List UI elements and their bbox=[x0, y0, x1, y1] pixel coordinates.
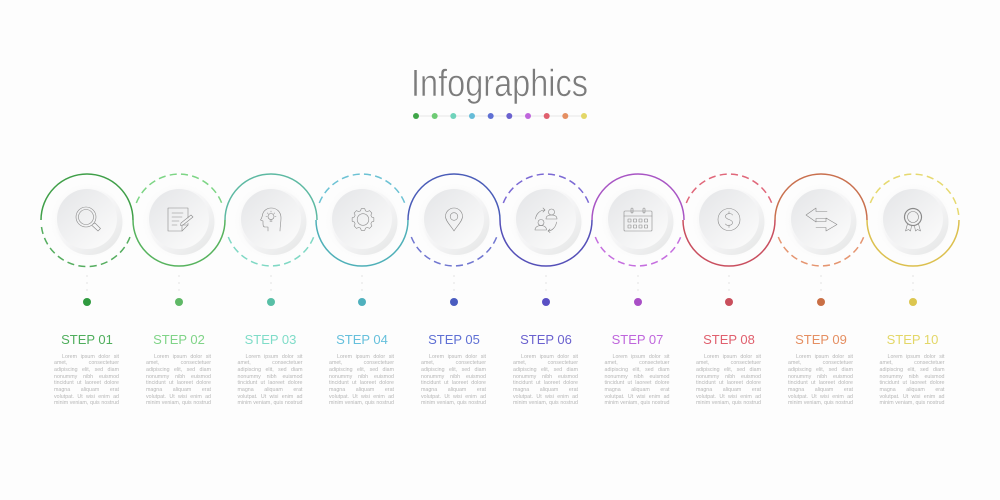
label: STEP 07 bbox=[612, 332, 663, 347]
label: STEP 02 bbox=[153, 332, 205, 347]
connector dots bbox=[636, 275, 638, 291]
body text: magna aliquam erat bbox=[880, 387, 944, 393]
marker dot bbox=[450, 298, 458, 306]
panel: step 08 bbox=[682, 173, 776, 406]
graphic: step 06 bbox=[499, 173, 593, 306]
label: STEP 08 bbox=[703, 332, 755, 347]
connector dots bbox=[361, 275, 363, 291]
body text: adipiscing elit, sed diam bbox=[788, 367, 853, 373]
body text: magna aliquam erat bbox=[696, 387, 761, 393]
body text: minim veniam, quis nostrud bbox=[513, 400, 578, 406]
body text bbox=[880, 354, 944, 406]
body text: nonummy nibh euismod bbox=[513, 374, 578, 380]
body text: tincidunt ut laoreet dolore bbox=[146, 380, 211, 386]
body text: nonummy nibh euismod bbox=[238, 374, 302, 380]
panel: step 03 bbox=[224, 173, 318, 406]
body text: tincidunt ut laoreet dolore bbox=[880, 380, 944, 386]
ring: step 07 bbox=[592, 174, 684, 266]
body text: tincidunt ut laoreet dolore bbox=[696, 380, 761, 386]
body text: amet, consectetuer bbox=[513, 360, 578, 366]
body text bbox=[238, 354, 302, 406]
body text: amet, consectetuer bbox=[421, 360, 486, 366]
body text: volutpat. Ut wisi enim ad bbox=[238, 394, 302, 400]
body text: magna aliquam erat bbox=[146, 387, 211, 393]
body text: volutpat. Ut wisi enim ad bbox=[696, 394, 761, 400]
header: title and colour dots bbox=[411, 63, 588, 119]
connector dots bbox=[453, 275, 455, 291]
body text: Lorem ipsum dolor sit bbox=[154, 354, 211, 360]
marker dot bbox=[817, 298, 825, 306]
marker dot bbox=[83, 298, 91, 306]
body text: magna aliquam erat bbox=[54, 387, 119, 393]
body text: adipiscing elit, sed diam bbox=[238, 367, 302, 373]
body text: minim veniam, quis nostrud bbox=[146, 400, 211, 406]
marker dot bbox=[175, 298, 183, 306]
ring: step 10 bbox=[866, 174, 958, 266]
body text: Lorem ipsum dolor sit bbox=[704, 354, 761, 360]
body text: Lorem ipsum dolor sit bbox=[246, 354, 302, 360]
body text: amet, consectetuer bbox=[880, 360, 944, 366]
body text bbox=[696, 354, 761, 406]
body text: magna aliquam erat bbox=[604, 387, 670, 393]
icon: exchange arrows bbox=[806, 208, 837, 231]
body text: minim veniam, quis nostrud bbox=[696, 400, 761, 406]
connector dots bbox=[270, 275, 272, 291]
body text: Lorem ipsum dolor sit bbox=[521, 354, 578, 360]
label: STEP 06 bbox=[520, 332, 572, 347]
panel: step 10 bbox=[866, 173, 960, 406]
body text: minim veniam, quis nostrud bbox=[788, 400, 853, 406]
label: STEP 05 bbox=[428, 332, 480, 347]
body text: amet, consectetuer bbox=[788, 360, 853, 366]
graphic: step 01 bbox=[40, 173, 134, 306]
graphic: step 02 bbox=[132, 173, 226, 306]
title: Infographics bbox=[411, 63, 588, 105]
body text: adipiscing elit, sed diam bbox=[513, 367, 578, 373]
body text: volutpat. Ut wisi enim ad bbox=[329, 394, 394, 400]
marker dot bbox=[542, 298, 550, 306]
body text: volutpat. Ut wisi enim ad bbox=[146, 394, 211, 400]
body text bbox=[146, 354, 211, 406]
panel: step 04 bbox=[315, 173, 409, 406]
ring: step 05 bbox=[408, 174, 500, 266]
panel: step 06 bbox=[499, 173, 593, 406]
body text bbox=[421, 354, 486, 406]
connector dots bbox=[178, 275, 180, 291]
body text: amet, consectetuer bbox=[604, 360, 670, 366]
body text: adipiscing elit, sed diam bbox=[329, 367, 394, 373]
body text: adipiscing elit, sed diam bbox=[54, 367, 119, 373]
body text: Lorem ipsum dolor sit bbox=[612, 354, 670, 360]
body text: volutpat. Ut wisi enim ad bbox=[604, 394, 670, 400]
body text bbox=[54, 354, 119, 406]
body text: minim veniam, quis nostrud bbox=[54, 400, 119, 406]
body text: volutpat. Ut wisi enim ad bbox=[54, 394, 119, 400]
panel: step 02 bbox=[132, 173, 226, 406]
body text: minim veniam, quis nostrud bbox=[880, 400, 944, 406]
icon: document and pen bbox=[168, 208, 193, 231]
icon: gear bbox=[352, 209, 374, 230]
body text: nonummy nibh euismod bbox=[696, 374, 761, 380]
body text: tincidunt ut laoreet dolore bbox=[421, 380, 486, 386]
body text: nonummy nibh euismod bbox=[880, 374, 944, 380]
ring: step 08 bbox=[683, 174, 775, 266]
body text: volutpat. Ut wisi enim ad bbox=[788, 394, 853, 400]
body text: tincidunt ut laoreet dolore bbox=[238, 380, 302, 386]
body text: minim veniam, quis nostrud bbox=[604, 400, 670, 406]
body text: minim veniam, quis nostrud bbox=[421, 400, 486, 406]
graphic: step 03 bbox=[224, 173, 318, 306]
marker dot bbox=[634, 298, 642, 306]
icon: people exchange bbox=[535, 208, 557, 232]
graphic: step 07 bbox=[591, 173, 685, 306]
body text: Lorem ipsum dolor sit bbox=[796, 354, 853, 360]
ring: step 02 bbox=[133, 174, 225, 266]
body text bbox=[513, 354, 578, 406]
body text: adipiscing elit, sed diam bbox=[421, 367, 486, 373]
icon: dollar coin bbox=[718, 208, 740, 230]
body text: amet, consectetuer bbox=[696, 360, 761, 366]
icon: calendar bbox=[624, 208, 652, 231]
body text bbox=[329, 354, 394, 406]
graphic: step 09 bbox=[774, 173, 868, 306]
panel: step 09 bbox=[774, 173, 868, 406]
body text: magna aliquam erat bbox=[788, 387, 853, 393]
body text: magna aliquam erat bbox=[238, 387, 302, 393]
body text: amet, consectetuer bbox=[146, 360, 211, 366]
body text: adipiscing elit, sed diam bbox=[880, 367, 944, 373]
marker dot bbox=[725, 298, 733, 306]
graphic: step 05 bbox=[407, 173, 501, 306]
graphic: step 08 bbox=[682, 173, 776, 306]
body text: tincidunt ut laoreet dolore bbox=[329, 380, 394, 386]
body text: magna aliquam erat bbox=[513, 387, 578, 393]
body text: Lorem ipsum dolor sit bbox=[429, 354, 486, 360]
icon: magnifier bbox=[76, 207, 100, 231]
body text: adipiscing elit, sed diam bbox=[604, 367, 670, 373]
body text: nonummy nibh euismod bbox=[329, 374, 394, 380]
marker dot bbox=[908, 298, 916, 306]
label: STEP 10 bbox=[887, 332, 938, 347]
body text: amet, consectetuer bbox=[238, 360, 302, 366]
body text: nonummy nibh euismod bbox=[788, 374, 853, 380]
body text: magna aliquam erat bbox=[329, 387, 394, 393]
icon: head with bulb bbox=[260, 208, 280, 231]
connector dots bbox=[545, 275, 547, 291]
panel: step 07 bbox=[591, 173, 685, 406]
connector dots bbox=[820, 275, 822, 291]
body text: amet, consectetuer bbox=[54, 360, 119, 366]
body text: minim veniam, quis nostrud bbox=[238, 400, 302, 406]
ring: step 04 bbox=[316, 174, 408, 266]
body text: volutpat. Ut wisi enim ad bbox=[513, 394, 578, 400]
ring: step 01 bbox=[41, 174, 133, 267]
icon: location pin bbox=[446, 208, 462, 231]
ring: step 09 bbox=[775, 174, 867, 266]
ring: step 03 bbox=[224, 174, 316, 266]
icon: award ribbon bbox=[904, 208, 921, 231]
body text: Lorem ipsum dolor sit bbox=[337, 354, 394, 360]
label: STEP 04 bbox=[336, 332, 388, 347]
body text bbox=[788, 354, 853, 406]
body text: tincidunt ut laoreet dolore bbox=[513, 380, 578, 386]
body text: adipiscing elit, sed diam bbox=[146, 367, 211, 373]
body text: adipiscing elit, sed diam bbox=[696, 367, 761, 373]
marker dot bbox=[266, 298, 274, 306]
label: STEP 09 bbox=[795, 332, 847, 347]
body text: nonummy nibh euismod bbox=[421, 374, 486, 380]
body text: volutpat. Ut wisi enim ad bbox=[880, 394, 944, 400]
body text: minim veniam, quis nostrud bbox=[329, 400, 394, 406]
panel: step 05 bbox=[407, 173, 501, 406]
body text: tincidunt ut laoreet dolore bbox=[788, 380, 853, 386]
colour dot row bbox=[413, 113, 587, 119]
body text bbox=[604, 354, 670, 406]
body text: tincidunt ut laoreet dolore bbox=[54, 380, 119, 386]
connector dots bbox=[912, 275, 914, 291]
body text: tincidunt ut laoreet dolore bbox=[604, 380, 670, 386]
body text: nonummy nibh euismod bbox=[54, 374, 119, 380]
connector dots bbox=[728, 275, 730, 291]
panel: step 01 bbox=[40, 173, 134, 406]
body text: volutpat. Ut wisi enim ad bbox=[421, 394, 486, 400]
body text: magna aliquam erat bbox=[421, 387, 486, 393]
body text: nonummy nibh euismod bbox=[604, 374, 670, 380]
graphic: step 10 bbox=[866, 173, 960, 306]
connector dots bbox=[86, 275, 88, 291]
graphic: step 04 bbox=[315, 173, 409, 306]
label: STEP 03 bbox=[245, 332, 296, 347]
body text: Lorem ipsum dolor sit bbox=[888, 354, 944, 360]
body text: nonummy nibh euismod bbox=[146, 374, 211, 380]
body text: amet, consectetuer bbox=[329, 360, 394, 366]
label: STEP 01 bbox=[61, 332, 113, 347]
marker dot bbox=[358, 298, 366, 306]
body text: Lorem ipsum dolor sit bbox=[62, 354, 119, 360]
ring: step 06 bbox=[500, 174, 592, 266]
